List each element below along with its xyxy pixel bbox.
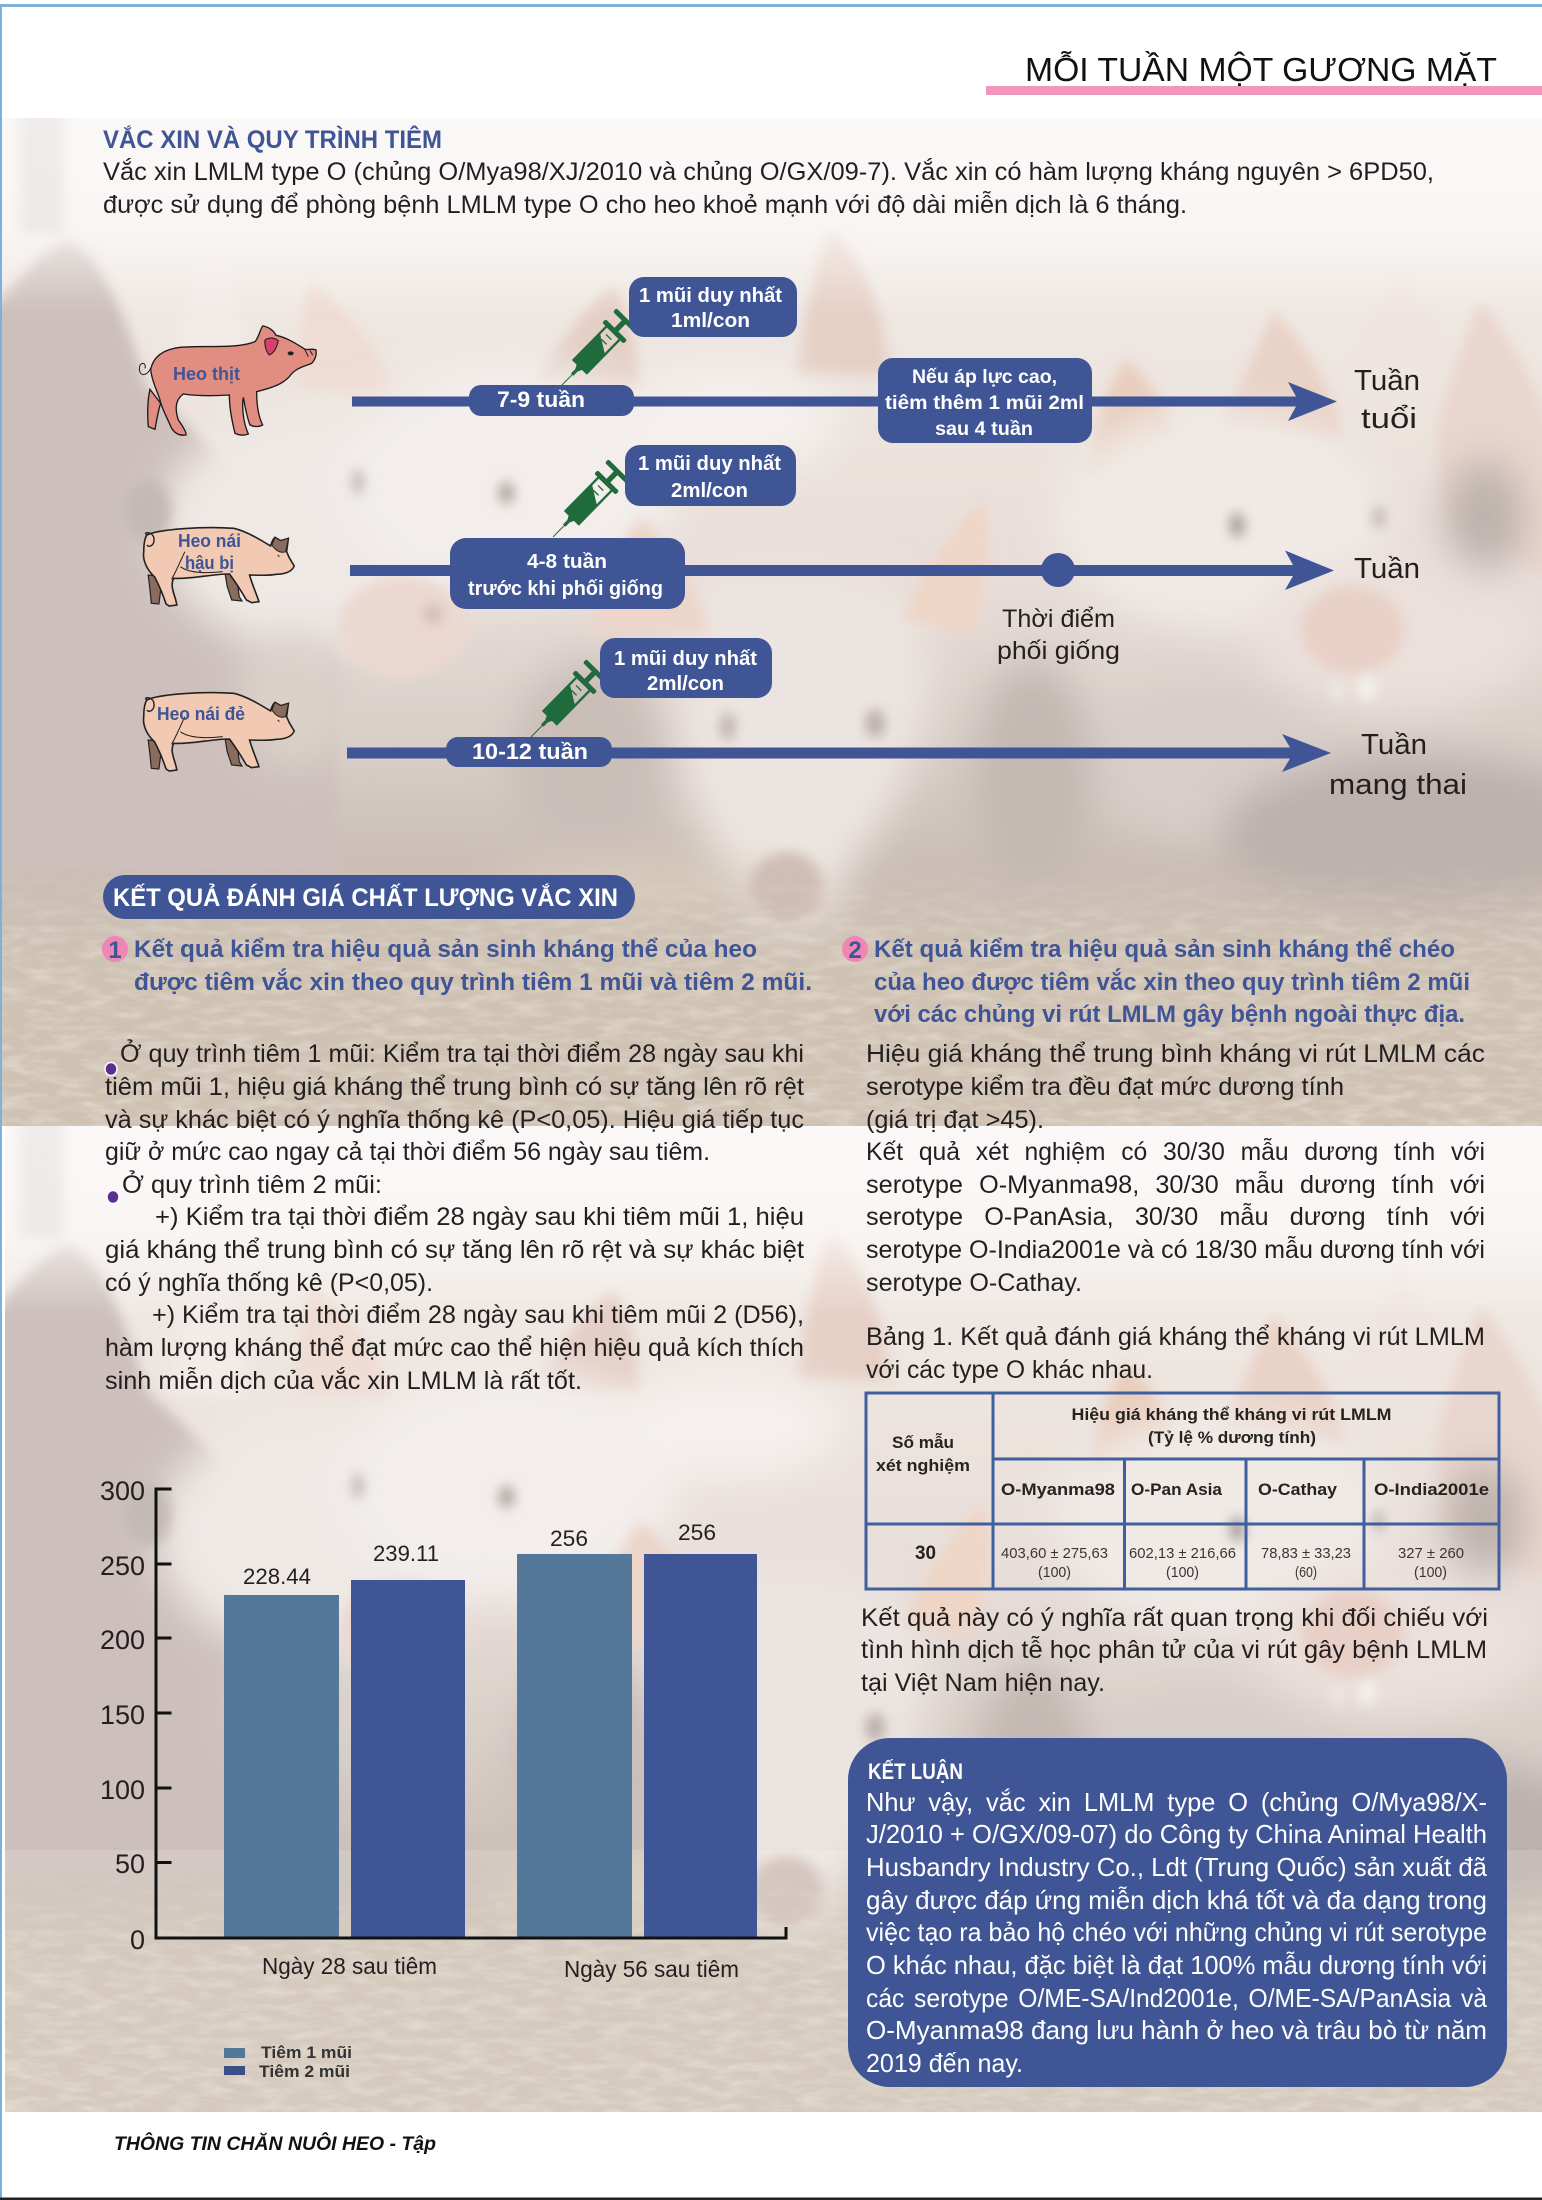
panel: conclusion: J/2010 + O/GX/09-07) do Công ty China Animal Health	[866, 1819, 1487, 1849]
gilt label: Heo nái	[178, 531, 241, 551]
axis label: weeks of age: Tuần	[1354, 365, 1420, 397]
photo background: upper pigs	[0, 105, 1542, 1142]
subheading 2: Kết quả kiểm tra hiệu quả sản sinh kháng thể chéo	[874, 936, 1455, 963]
axis label: gestation weeks	[1329, 729, 1467, 801]
intro paragraph: Vắc xin LMLM type O (chủng O/Mya98/XJ/2010 và chủng O/GX/09-7). Vắc xin có hàm lượng kháng nguyên > 6PD50,	[103, 157, 1434, 186]
right column text block: Kết quả xét nghiệm có 30/30 mẫu dương tính với	[866, 1137, 1485, 1166]
pig label: Heo thịt	[173, 364, 240, 384]
chart legend	[224, 2043, 352, 2081]
x axis labels: Ngày 56 sau tiêm	[564, 1956, 739, 1982]
table: antibody titres: (60)	[1295, 1564, 1317, 1581]
left column text block: Ở quy trình tiêm 2 mũi:	[122, 1169, 382, 1199]
label: 4-8 weeks before mating	[450, 538, 685, 609]
table: antibody titres: (Tỷ lệ % dương tính)	[1148, 1428, 1316, 1447]
left column text block: hàm lượng kháng thể đạt mức cao thể hiện hiệu quả kích thích	[105, 1334, 804, 1362]
y axis labels: 50	[115, 1849, 145, 1879]
label: 10-12 weeks	[446, 737, 612, 767]
callout: single dose 2ml	[625, 445, 796, 506]
y axis labels: 300	[100, 1476, 145, 1506]
left column text block: sinh miễn dịch của vắc xin LMLM là rất tốt.	[105, 1366, 582, 1395]
timeline row 3: farrowing sows	[144, 638, 1467, 801]
icon: gilt pig	[144, 528, 294, 606]
y axis labels: 200	[100, 1625, 145, 1655]
label: mating time: Thời điểm	[1002, 605, 1115, 633]
left column text block: giữ ở mức cao ngay cả tại thời điểm 56 ngày sau tiêm.	[105, 1138, 710, 1166]
panel: conclusion: Như vậy, vắc xin LMLM type O (chủng O/Mya98/X-	[866, 1787, 1487, 1817]
left column text block: giá kháng thể trung bình có sự tăng lên rõ rệt và sự khác biệt	[105, 1236, 804, 1264]
table caption: với các type O khác nhau.	[866, 1356, 1153, 1384]
icon: syringe	[550, 308, 638, 397]
chart legend: Tiêm 2 mũi	[259, 2062, 350, 2081]
table: antibody titres	[866, 1393, 1499, 1589]
subheading 2: với các chủng vi rút LMLM gây bệnh ngoài thực địa.	[874, 1001, 1465, 1028]
left column text block: +) Kiểm tra tại thời điểm 28 ngày sau khi tiêm mũi 1, hiệu	[155, 1203, 804, 1231]
right column text block: serotype O-Cathay.	[866, 1269, 1082, 1297]
footer: THÔNG TIN CHĂN NUÔI HEO - Tập	[114, 2133, 436, 2155]
axis label: weeks of age	[1354, 365, 1420, 435]
panel: conclusion: O-Myanma98 đang lưu hành ở heo và trâu bò từ năm	[866, 2015, 1487, 2045]
y axis labels: 100	[100, 1775, 145, 1805]
label: mating time: phối giống	[997, 637, 1120, 665]
label: 7-9 weeks	[469, 385, 634, 416]
panel: conclusion: Husbandry Industry Co., Ldt (Trung Quốc) sản xuất đã	[866, 1852, 1488, 1882]
sow label: Heo nái đẻ	[157, 704, 245, 724]
heading: vaccine and schedule: VẮC XIN VÀ QUY TRÌNH TIÊM	[103, 124, 442, 154]
subheading 1	[102, 936, 812, 996]
gilt label: hậu bị	[185, 553, 234, 573]
subheading 2	[842, 936, 1470, 1028]
left column text block: +) Kiểm tra tại thời điểm 28 ngày sau khi tiêm mũi 2 (D56),	[152, 1301, 804, 1329]
label: 7-9 weeks: 7-9 tuần	[497, 387, 585, 412]
right column text block: Hiệu giá kháng thể trung bình kháng vi rút LMLM các	[866, 1040, 1485, 1068]
subheading 1: Kết quả kiểm tra hiệu quả sản sinh kháng thể của heo	[134, 936, 757, 963]
callout: high pressure extra dose: Nếu áp lực cao,	[912, 367, 1057, 388]
value labels: 256	[678, 1520, 716, 1545]
callout: single dose 2ml: 2ml/con	[647, 673, 724, 695]
section title with pink bar: MỖI TUẦN MỘT GƯƠNG MẶT	[1025, 51, 1497, 88]
bar chart: antibody titres	[100, 1476, 786, 1982]
arrow: gestation weeks	[347, 734, 1331, 772]
table: antibody titres: (100)	[1166, 1564, 1199, 1581]
callout: high pressure extra dose: sau 4 tuần	[935, 419, 1033, 440]
right column text block: serotype O-Myanma98, 30/30 mẫu dương tính với	[866, 1170, 1485, 1199]
icon: syringe	[542, 459, 630, 548]
y axis labels: 150	[100, 1700, 145, 1730]
timeline row 2: gilts	[144, 445, 1420, 665]
page bottom rule	[0, 2198, 1542, 2200]
right column text block	[866, 1040, 1485, 1297]
callout: single dose 1ml	[629, 277, 797, 337]
bullet	[105, 1062, 117, 1076]
label: 4-8 weeks before mating: trước khi phối giống	[468, 578, 663, 600]
table: antibody titres: O-Pan Asia	[1131, 1480, 1223, 1499]
axis label: gestation weeks: mang thai	[1329, 769, 1467, 801]
table: antibody titres: xét nghiệm	[876, 1456, 970, 1475]
left column text block	[105, 1038, 804, 1395]
section title with pink bar	[986, 51, 1542, 95]
panel: conclusion: 2019 đến nay.	[866, 2048, 1023, 2078]
right column text block: serotype O-PanAsia, 30/30 mẫu dương tính với	[866, 1202, 1485, 1231]
left column text block: tiêm mũi 1, hiệu giá kháng thể trung bình có sự tăng lên rõ rệt	[105, 1073, 804, 1101]
table: antibody titres: (100)	[1038, 1564, 1071, 1581]
gilt label	[178, 531, 241, 573]
panel: conclusion: O khác nhau, đặc biệt là đạt 100% mẫu dương tính với	[866, 1950, 1487, 1980]
label: mating time	[997, 605, 1120, 665]
icon: fattening pig	[139, 326, 316, 435]
chart legend: Tiêm 1 mũi	[261, 2043, 352, 2062]
value labels: 256	[550, 1526, 588, 1551]
callout: single dose 1ml: 1 mũi duy nhất	[639, 285, 782, 307]
paragraph after table: tại Việt Nam hiện nay.	[861, 1669, 1105, 1697]
table: antibody titres: O-Cathay	[1258, 1480, 1338, 1499]
section pill heading: quality evaluation: KẾT QUẢ ĐÁNH GIÁ CHẤT LƯỢNG VẮC XIN	[113, 882, 618, 912]
subheading 2: của heo được tiêm vắc xin theo quy trình tiêm 2 mũi	[874, 968, 1470, 996]
table: antibody titres: 30	[915, 1543, 936, 1564]
y axis labels: 0	[130, 1925, 145, 1955]
left column text block: Ở quy trình tiêm 1 mũi: Kiểm tra tại thời điểm 28 ngày sau khi	[120, 1038, 804, 1068]
callout: high pressure extra dose	[878, 358, 1092, 443]
marker: mating point	[1041, 553, 1075, 587]
label: 10-12 weeks: 10-12 tuần	[472, 739, 588, 764]
bars	[224, 1554, 757, 1939]
subheading 2: 2	[848, 937, 862, 964]
table: antibody titres: Số mẫu	[892, 1433, 954, 1452]
table: antibody titres: 602,13 ± 216,66	[1129, 1545, 1236, 1562]
intro paragraph: được sử dụng để phòng bệnh LMLM type O cho heo khoẻ mạnh với độ dài miễn dịch là 6 tháng.	[103, 190, 1187, 219]
y axis labels: 250	[100, 1551, 145, 1581]
axis label: weeks: Tuần	[1354, 553, 1420, 585]
value labels: 239.11	[373, 1541, 439, 1566]
photo background: lower pigs	[0, 1109, 1542, 2146]
paragraph after table: Kết quả này có ý nghĩa rất quan trọng khi đối chiếu với	[861, 1604, 1488, 1632]
table: antibody titres: 327 ± 260	[1398, 1545, 1464, 1562]
y axis labels	[100, 1476, 145, 1955]
panel: conclusion: các serotype O/ME-SA/Ind2001e, O/ME-SA/PanAsia và	[866, 1983, 1488, 2013]
left column text block: và sự khác biệt có ý nghĩa thống kê (P<0,05). Hiệu giá tiếp tục	[105, 1106, 804, 1134]
icon: syringe	[520, 659, 608, 748]
page frame left rule	[0, 4, 2, 2198]
icon: sow	[144, 693, 294, 771]
page frame top rule	[0, 4, 1542, 7]
table: antibody titres: O-India2001e	[1374, 1480, 1489, 1499]
callout: high pressure extra dose: tiêm thêm 1 mũi 2ml	[885, 393, 1084, 414]
x axis labels: Ngày 28 sau tiêm	[262, 1953, 437, 1979]
table caption	[866, 1323, 1485, 1384]
table: antibody titres: (100)	[1414, 1564, 1447, 1581]
panel: conclusion: việc tạo ra bảo hộ chéo với những chủng vi rút serotype	[866, 1917, 1487, 1947]
panel: conclusion	[848, 1738, 1507, 2087]
callout: single dose 2ml: 2ml/con	[671, 480, 748, 502]
callout: single dose 1ml: 1ml/con	[671, 310, 750, 332]
section pill heading: quality evaluation	[103, 875, 635, 919]
arrow: weeks of age	[352, 382, 1337, 421]
x axis labels	[262, 1953, 739, 1982]
callout: single dose 2ml: 1 mũi duy nhất	[614, 648, 757, 670]
subheading 1: 1	[108, 937, 122, 964]
right column text block: serotype O-India2001e và có 18/30 mẫu dương tính với	[866, 1235, 1485, 1264]
left column text block: có ý nghĩa thống kê (P<0,05).	[105, 1269, 433, 1297]
table: antibody titres: Hiệu giá kháng thể kháng vi rút LMLM	[1072, 1405, 1392, 1424]
paragraph after table: tình hình dịch tễ học phân tử của vi rút gây bệnh LMLM	[861, 1635, 1487, 1664]
table: antibody titres: O-Myanma98	[1001, 1480, 1115, 1499]
bullet	[107, 1190, 119, 1204]
axes	[156, 1489, 786, 1938]
intro paragraph	[103, 157, 1434, 219]
value labels	[243, 1520, 716, 1589]
paragraph after table	[861, 1604, 1488, 1697]
right column text block: (giá trị đạt >45).	[866, 1106, 1044, 1134]
callout: single dose 2ml	[600, 638, 772, 698]
timeline row 1: fattening pigs	[139, 277, 1420, 443]
arrow: weeks	[350, 550, 1334, 590]
axis label: weeks of age: tuổi	[1361, 403, 1417, 435]
right column text block: serotype kiểm tra đều đạt mức dương tính	[866, 1073, 1344, 1101]
panel: conclusion: gây được đáp ứng miễn dịch khá tốt và đa dạng trong	[866, 1885, 1487, 1915]
axis label: gestation weeks: Tuần	[1361, 729, 1427, 761]
subheading 1: được tiêm vắc xin theo quy trình tiêm 1 mũi và tiêm 2 mũi.	[134, 968, 812, 996]
table caption: Bảng 1. Kết quả đánh giá kháng thể kháng vi rút LMLM	[866, 1323, 1485, 1351]
panel: conclusion: KẾT LUẬN	[868, 1759, 963, 1784]
callout: single dose 2ml: 1 mũi duy nhất	[638, 453, 781, 475]
table: antibody titres: 78,83 ± 33,23	[1261, 1545, 1351, 1562]
value labels: 228.44	[243, 1564, 311, 1589]
label: 4-8 weeks before mating: 4-8 tuần	[527, 551, 607, 573]
table: antibody titres: 403,60 ± 275,63	[1001, 1545, 1108, 1562]
